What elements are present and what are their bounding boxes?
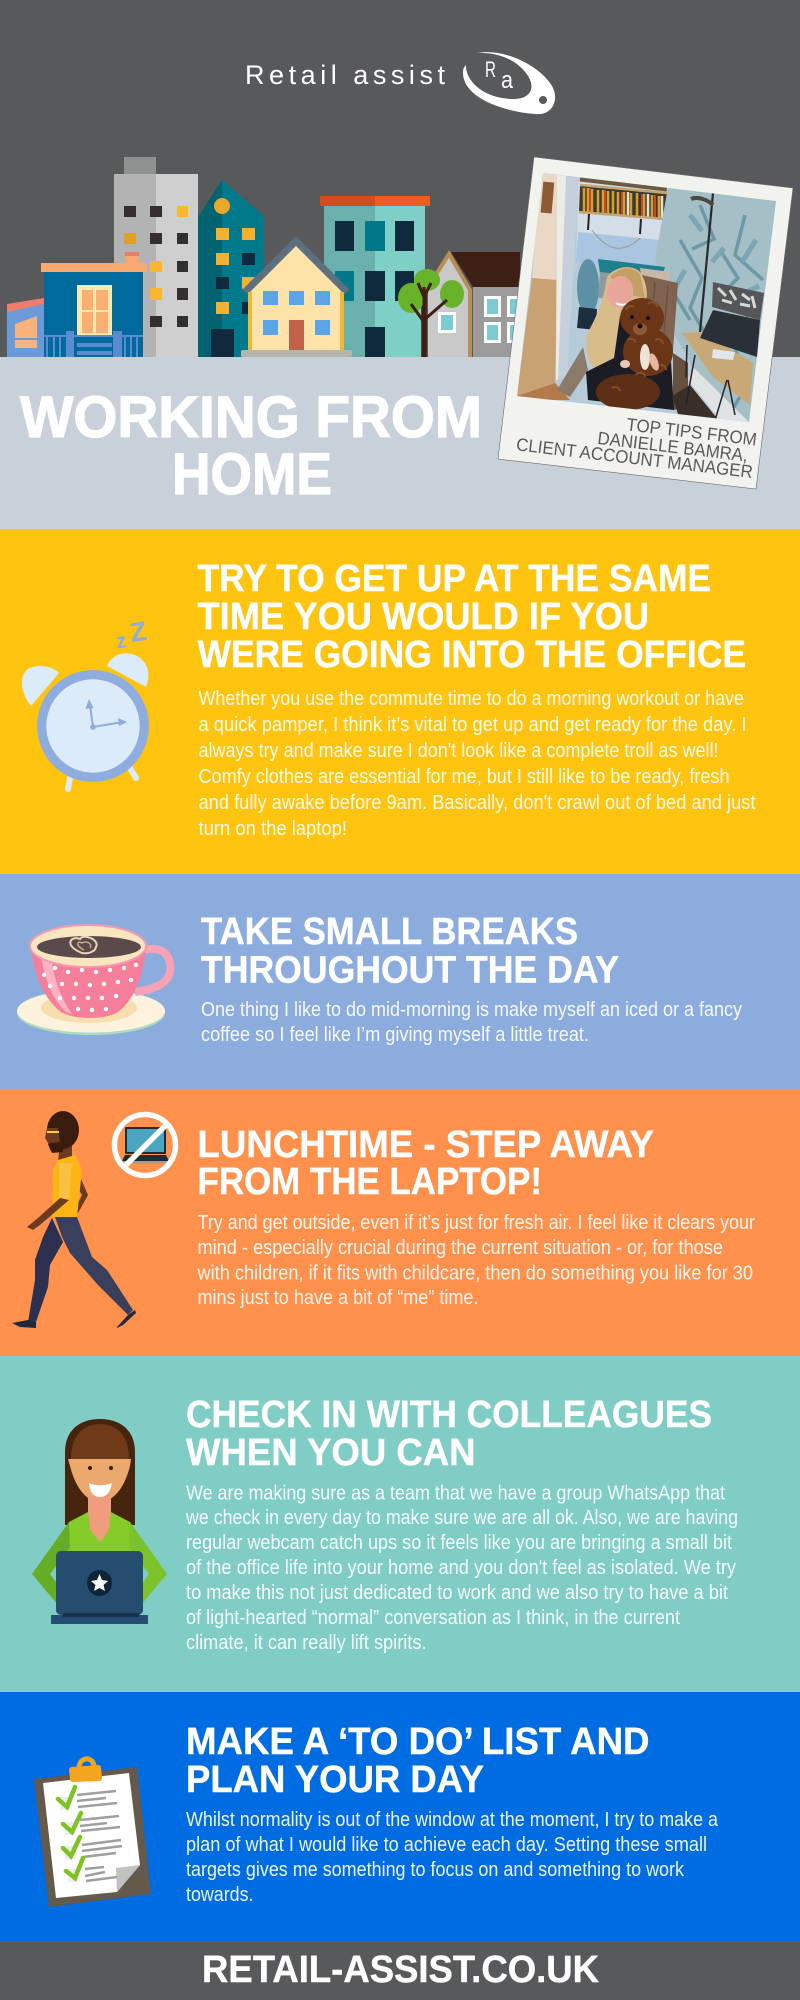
body text: [197, 1212, 755, 1309]
icon: woman at laptop: [32, 1419, 167, 1624]
heading: WERE GOING INTO THE OFFICE: [198, 634, 746, 676]
body text: a quick pamper, I think it’s vital to get up and get ready for the day. I: [198, 714, 746, 736]
body text: and fully awake before 9am. Basically, don't crawl out of bed and just: [198, 792, 756, 814]
panel: check in: [0, 1356, 800, 1692]
wallpaper: [655, 187, 776, 422]
dark blue building with door: [41, 252, 147, 357]
tree: [398, 269, 464, 357]
heading: TIME YOU WOULD IF YOU: [198, 596, 649, 638]
grey tower: [114, 157, 198, 357]
body text: of light-hearted “normal” conversation as I think, in the current: [186, 1607, 680, 1629]
title panel: [0, 357, 800, 529]
brown roof house: [428, 252, 520, 357]
body text: We are making sure as a team that we have a group WhatsApp that: [186, 1482, 725, 1504]
heading: TAKE SMALL BREAKS: [201, 911, 578, 953]
heading: FROM THE LAPTOP!: [198, 1161, 542, 1203]
body text: [201, 999, 742, 1046]
body text: always try and make sure I don't look like a complete troll as well!: [198, 740, 718, 762]
panel: lunchtime: [0, 1089, 800, 1356]
heading: CHECK IN WITH COLLEAGUES: [186, 1394, 712, 1436]
small left blue building: [7, 298, 44, 357]
heading: MAKE A ‘TO DO’ LIST AND: [186, 1721, 650, 1763]
yellow house: [241, 241, 352, 357]
logo: [245, 52, 555, 114]
tall aqua building: [320, 196, 430, 357]
dog: [596, 298, 673, 410]
buildings illustration: [7, 157, 520, 357]
logo: a: [501, 67, 514, 94]
icon: alarm clock: [22, 616, 149, 789]
heading: [186, 1394, 712, 1474]
desk, lamp and laptop: [672, 193, 764, 422]
body text: climate, it can really lift spirits.: [186, 1632, 426, 1654]
body text: coffee so I feel like I’m giving myself a little treat.: [201, 1024, 589, 1046]
panel: small breaks: [0, 874, 800, 1089]
photo caption: [515, 414, 758, 482]
footer website: RETAIL-ASSIST.CO.UK: [202, 1949, 600, 1991]
heading: [198, 1124, 654, 1203]
body text: Whilst normality is out of the window at the moment, I try to make a: [186, 1809, 719, 1831]
cushions: [577, 259, 670, 330]
panel: get up: [0, 529, 800, 874]
heading: PLAN YOUR DAY: [186, 1759, 484, 1801]
main title: WORKING FROM: [20, 385, 482, 450]
panel: to do list: [0, 1692, 800, 1942]
footer panel: [0, 1942, 800, 2000]
body text: mins just to have a bit of “me” time.: [198, 1287, 478, 1309]
logo: R: [485, 57, 496, 82]
icon: alarm clock: Z: [128, 616, 149, 648]
logo: Retail assist: [245, 60, 445, 90]
body text: [186, 1809, 719, 1906]
photo of Danielle with dog: [510, 170, 780, 430]
heading: THROUGHOUT THE DAY: [201, 950, 619, 992]
icon: alarm clock: z: [114, 629, 128, 653]
back wall with bookshelf: [576, 178, 668, 273]
body text: [198, 688, 756, 840]
main title: HOME: [172, 442, 332, 507]
body text: plan of what I would like to achieve each day. Setting these small: [186, 1834, 707, 1856]
main title: [20, 385, 482, 507]
body text: mind - especially crucial during the current situation - or, for those: [198, 1237, 723, 1259]
body text: to make this not just dedicated to work and we also try to have a bit: [186, 1582, 728, 1604]
teal pointed building: [198, 180, 264, 357]
body text: of the office life into your home and you don't feel as isolated. We try: [186, 1557, 736, 1579]
icon: no laptop: [114, 1114, 176, 1176]
heading: [186, 1721, 650, 1801]
heading: [198, 558, 746, 676]
body text: regular webcam catch ups so it feels like you are bringing a small bit: [186, 1532, 732, 1554]
photo caption: TOP TIPS FROM: [625, 414, 758, 449]
heading: [201, 911, 619, 992]
body text: towards.: [186, 1884, 254, 1906]
heading: LUNCHTIME - STEP AWAY: [198, 1124, 654, 1166]
body text: One thing I like to do mid-morning is make myself an iced or a fancy: [201, 999, 742, 1021]
body text: [185, 1482, 738, 1654]
body text: targets gives me something to focus on and something to work: [186, 1859, 685, 1881]
heading: WHEN YOU CAN: [186, 1432, 476, 1474]
icon: clipboard: [34, 1759, 151, 1907]
chair: [557, 275, 688, 410]
body text: turn on the laptop!: [198, 818, 347, 840]
body text: with children, if it fits with childcare, then do something you like for 30: [197, 1262, 753, 1284]
header panel: [0, 0, 800, 357]
polaroid photo: [498, 157, 793, 489]
body text: Comfy clothes are essential for me, but I still like to be ready, fresh: [198, 766, 730, 788]
heading: TRY TO GET UP AT THE SAME: [198, 558, 711, 600]
left room and floor: [517, 173, 579, 400]
body text: we check in every day to make sure we are all ok. Also, we are having: [185, 1507, 738, 1529]
photo caption: CLIENT ACCOUNT MANAGER: [515, 434, 754, 482]
icon: coffee cup: [17, 925, 170, 1035]
body text: Whether you use the commute time to do a morning workout or have: [198, 688, 744, 710]
icon: walking man: [12, 1111, 136, 1328]
woman: [586, 267, 674, 410]
photo caption: DANIELLE BAMRA,: [597, 428, 749, 465]
